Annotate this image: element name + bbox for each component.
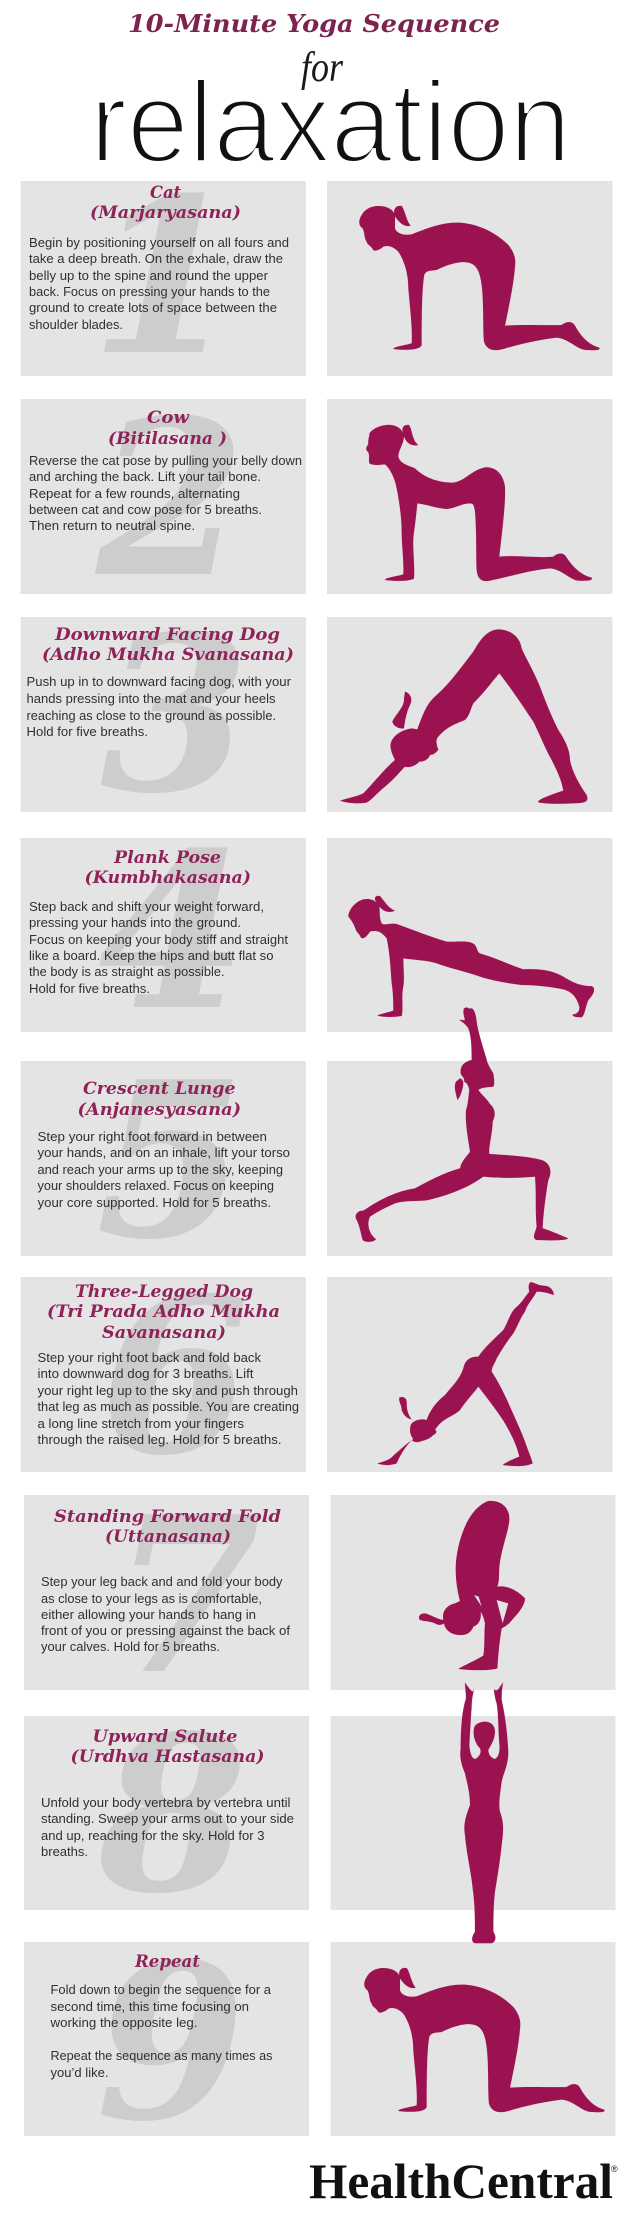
numeral 7: 7: [112, 1469, 262, 1722]
heading: Standing Forward Fold: [54, 1507, 281, 1527]
body text: [26, 675, 291, 739]
body text: your shoulders relaxed. Focus on keeping: [38, 1179, 274, 1193]
text panel: [20, 1277, 306, 1472]
numeral 9: 9: [96, 1916, 246, 2169]
body text: shoulder blades.: [29, 318, 123, 332]
body text: Repeat the sequence as many times as: [50, 2049, 272, 2063]
body text: [38, 1130, 290, 1210]
figure panel: [327, 1277, 612, 1472]
heading: Repeat: [134, 1952, 200, 1972]
body text: Begin by positioning yourself on all fours and: [29, 236, 289, 250]
heading: Cat: [150, 183, 181, 203]
body text: Step your right foot forward in between: [38, 1130, 267, 1144]
body text: second time, this time focusing on: [50, 2000, 249, 2014]
body text: Reverse the cat pose by pulling your belly down: [29, 454, 302, 468]
heading: (Anjanesyasana): [78, 1100, 241, 1120]
heading: (Tri Prada Adho Mukha: [47, 1302, 280, 1322]
body text: that leg as much as possible. You are creating: [38, 1400, 299, 1414]
numeral 6: 6: [100, 1250, 250, 1503]
step 7: standing forward fold: [24, 1469, 616, 1722]
body text: through the raised leg. Hold for 5 breaths.: [38, 1433, 282, 1447]
heading: Crescent Lunge: [83, 1079, 236, 1099]
body text: Step your right foot back and fold back: [38, 1351, 262, 1365]
figure: crescent lunge: [356, 1007, 568, 1242]
step 2: cow: [20, 372, 612, 625]
step 9: repeat: [24, 1916, 616, 2169]
numeral 5: 5: [96, 1034, 246, 1287]
body text: between cat and cow pose for 5 breaths.: [29, 503, 262, 517]
numeral 2: 2: [94, 372, 246, 625]
figure panel: [327, 838, 612, 1032]
numeral 1: 1: [90, 150, 240, 403]
figure: plank: [348, 896, 594, 1017]
body text: like a board. Keep the hips and butt flat so: [29, 949, 274, 963]
body text: [29, 900, 289, 996]
text panel: [20, 399, 306, 594]
step 1: cat: [20, 150, 612, 403]
header: [90, 9, 571, 187]
body text: Hold for five breaths.: [26, 725, 148, 739]
body text: Then return to neutral spine.: [29, 519, 195, 533]
title word: for: for: [301, 45, 344, 91]
body text: [29, 236, 289, 332]
body text: Push up in to downward facing dog, with your: [26, 675, 291, 689]
heading: Plank Pose: [113, 848, 221, 868]
figure panel: [327, 1061, 612, 1256]
numeral 3: 3: [100, 588, 250, 841]
heading: (Adho Mukha Svanasana): [42, 645, 294, 665]
figure: forward fold: [419, 1501, 525, 1670]
body text: take a deep breath. On the exhale, draw the: [29, 252, 283, 266]
logo: HealthCentral: ®: [611, 2164, 618, 2174]
body text: [49, 1983, 272, 2080]
body text: reaching as close to the ground as possible.: [26, 709, 276, 723]
body text: [41, 1575, 291, 1654]
body text: your core supported. Hold for 5 breaths.: [38, 1196, 271, 1210]
body text: you’d like.: [50, 2066, 108, 2080]
figure panel: [330, 1942, 616, 2136]
body text: your right leg up to the sky and push through: [38, 1384, 298, 1398]
heading: [108, 408, 227, 449]
numeral 8: 8: [97, 1688, 248, 1941]
body text: belly up to the spine and round the upper: [29, 269, 268, 283]
heading: Savanasana): [102, 1323, 226, 1343]
heading: [54, 1507, 281, 1547]
figure: cat pose: [359, 206, 600, 350]
body text: your calves. Hold for 5 breaths.: [41, 1640, 220, 1654]
body text: Step back and shift your weight forward,: [29, 900, 264, 914]
body text: Hold for five breaths.: [29, 982, 150, 996]
body text: as close to your legs as is comfortable,: [41, 1592, 262, 1606]
body text: either allowing your hands to hang in: [41, 1608, 256, 1622]
heading: [78, 1079, 241, 1120]
figure panel: [330, 1716, 616, 1910]
body text: ground to create lots of space between the: [29, 301, 277, 315]
body text: standing. Sweep your arms out to your side: [41, 1812, 294, 1826]
heading: [47, 1282, 280, 1343]
heading: Downward Facing Dog: [54, 625, 280, 645]
text panel: [20, 617, 306, 812]
body text: hands pressing into the mat and your heels: [26, 692, 276, 706]
heading: Cow: [147, 408, 190, 428]
text panel: [20, 181, 306, 376]
body text: a long line stretch from your fingers: [38, 1417, 244, 1431]
body text: Fold down to begin the sequence for a: [50, 1983, 271, 1997]
body text: breaths.: [41, 1845, 88, 1859]
heading: (Marjaryasana): [90, 203, 241, 223]
heading: Upward Salute: [92, 1727, 238, 1747]
figure panel: [330, 1495, 616, 1690]
figure: downward dog: [340, 629, 587, 804]
figure: upward salute: [460, 1682, 508, 1943]
text panel: [24, 1942, 309, 2136]
figure: cat pose repeat: [364, 1968, 605, 2112]
heading: [90, 183, 241, 223]
body text: [29, 454, 302, 533]
step 6: three-legged dog: [20, 1250, 612, 1503]
heading: (Urdhva Hastasana): [70, 1747, 264, 1767]
figure panel: [327, 181, 612, 376]
logo: HealthCentral: HealthCentral: [309, 2153, 613, 2209]
figure panel: [327, 617, 612, 812]
body text: Step your leg back and and fold your body: [41, 1575, 283, 1589]
heading: [70, 1727, 264, 1767]
body text: [41, 1796, 294, 1859]
text panel: [24, 1495, 309, 1690]
figure: three-legged dog: [377, 1282, 554, 1466]
step 3: downward facing dog: [20, 588, 612, 841]
body text: Focus on keeping your body stiff and straight: [29, 933, 289, 947]
body text: [38, 1351, 299, 1447]
step 8: upward salute: [24, 1682, 616, 1943]
body text: the body is as straight as possible.: [29, 965, 224, 979]
numeral 4: 4: [98, 805, 248, 1058]
title line: 10-Minute Yoga Sequence: [128, 9, 500, 38]
body text: pressing your hands into the ground.: [29, 916, 241, 930]
heading: Three-Legged Dog: [75, 1282, 253, 1302]
text panel: [24, 1716, 309, 1910]
body text: and arching the back. Lift your tail bone.: [29, 470, 261, 484]
body text: working the opposite leg.: [49, 2016, 198, 2030]
body text: Repeat for a few rounds, alternating: [29, 487, 240, 501]
figure: cow pose: [366, 425, 592, 581]
step 5: crescent lunge: [20, 1007, 612, 1287]
body text: and up, reaching for the sky. Hold for 3: [41, 1829, 265, 1843]
text panel: [20, 838, 306, 1032]
figure panel: [327, 399, 612, 594]
heading: [42, 625, 294, 665]
heading: [84, 848, 251, 888]
heading: (Bitilasana ): [108, 429, 227, 449]
heading: (Kumbhakasana): [84, 868, 251, 888]
text panel: [20, 1061, 306, 1256]
body text: Unfold your body vertebra by vertebra until: [41, 1796, 290, 1810]
body text: and reach your arms up to the sky, keeping: [38, 1163, 283, 1177]
body text: your hands, and on an inhale, lift your torso: [38, 1146, 290, 1160]
heading: (Uttanasana): [105, 1527, 231, 1547]
step 4: plank pose: [20, 805, 612, 1058]
body text: back. Focus on pressing your hands to the: [29, 285, 270, 299]
body text: into downward dog for 3 breaths. Lift: [38, 1367, 254, 1381]
body text: front of you or pressing against the back of: [41, 1624, 291, 1638]
title word: relaxation: relaxation: [90, 57, 571, 187]
